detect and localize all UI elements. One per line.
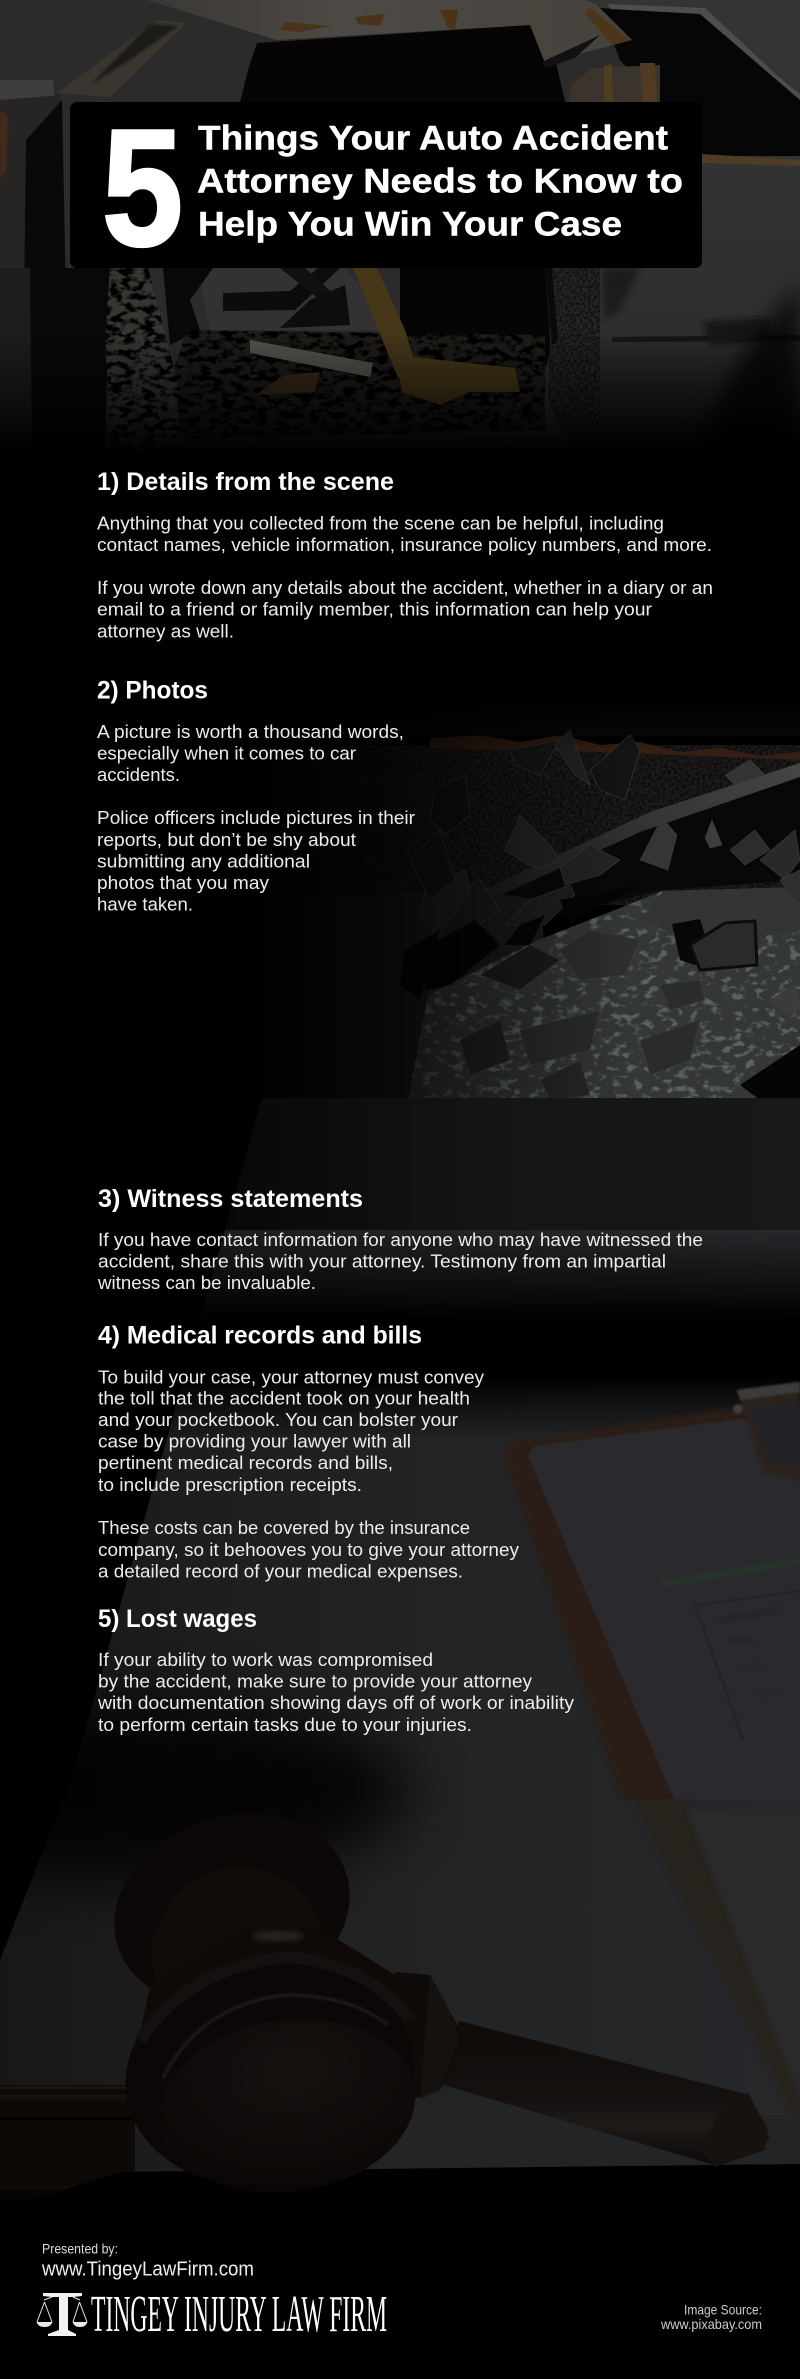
footer: image source: Image Source: [684,2301,762,2317]
title banner [70,96,702,281]
yellow frame [353,268,418,378]
section 5 heading: 5) Lost wages [98,1605,257,1633]
glass shards [410,730,800,1100]
rusted pillar [568,65,660,156]
clipboard frame [503,1400,800,1830]
gavel handle [440,2021,770,2165]
section 4 body: to include prescription receipts. [98,1475,362,1495]
footer: presented by: www.TingeyLawFirm.com [41,2259,254,2281]
rear frame [590,0,800,96]
section 5 body: If your ability to work was compromised [98,1650,433,1670]
icon: scales of justice T [36,2293,88,2336]
section 3 body: If you have contact information for anyone who may have witnessed the [98,1230,703,1250]
background photo: shattered glass car [238,680,800,1100]
background photo: gavel [0,1700,800,2379]
section 4 body: To build your case, your attorney must convey [98,1367,484,1387]
section 4 body: These costs can be covered by the insurance [98,1518,470,1538]
title text: Things Your Auto Accident [198,120,668,158]
paper details [660,1558,800,1588]
section 2 heading: 2) Photos [97,677,208,705]
section 1 body: contact names, vehicle information, insurance policy numbers, and more. [97,535,712,555]
section 2 body: Police officers include pictures in their [97,808,415,828]
section 3 heading: 3) Witness statements [98,1185,363,1213]
left pillar [57,20,187,97]
section 2: photos [97,677,415,915]
section 5: lost wages [97,1605,574,1735]
section 2 body: reports, but don’t be shy about [97,830,356,850]
section 3 body: accident, share this with your attorney. Testimony from an impartial [98,1252,666,1272]
tire [30,268,110,450]
gavel front head [111,1944,429,2206]
footer: presented by [41,2240,254,2281]
clipboard clip [737,1382,800,1480]
section 5 body: to perform certain tasks due to your injuries. [98,1715,472,1735]
section 4 body: pertinent medical records and bills, [98,1453,393,1473]
footer: image source: www.pixabay.com [660,2316,762,2332]
roof beam [147,0,632,63]
white bar [250,340,373,377]
section 4 body: and your pocketbook. You can bolster your [98,1410,458,1430]
section 4 body [98,1367,519,1581]
section 2 body: especially when it comes to car [97,743,356,763]
window view [197,268,395,330]
mirror [672,919,757,970]
section 3 body: witness can be invaluable. [97,1273,316,1293]
section 2 body [97,722,415,915]
section 5 body: with documentation showing days off of work or inability [97,1693,574,1713]
title text [197,120,683,244]
section 3 body [97,1230,703,1293]
gavel collars [395,1972,465,2100]
section 2 body: accidents. [97,765,180,785]
debris [150,330,545,440]
section 2 body: photos that you may [97,873,269,893]
background photo: clipboard [63,1098,800,1830]
section 4 heading: 4) Medical records and bills [98,1322,422,1350]
section 4 body: case by providing your lawyer with all [98,1432,411,1452]
big number 5: 5 [102,96,183,281]
title text: Attorney Needs to Know to [197,162,683,200]
section 1 body: attorney as well. [97,622,234,642]
section 2 body: have taken. [97,895,193,915]
section 4 body: the toll that the accident took on your health [98,1389,470,1409]
car interior [230,25,566,380]
section 5 body: by the accident, make sure to provide your attorney [98,1672,532,1692]
door edge [545,268,600,450]
section 1 body: If you wrote down any details about the accident, whether in a diary or an [97,578,713,598]
section 3: witness statements [97,1185,703,1293]
section 4 body: a detailed record of your medical expenses. [98,1561,463,1581]
section 1: details from the scene [97,468,713,642]
section 1 body: Anything that you collected from the scene can be helpful, including [97,514,664,534]
infographic canvas: TINGEY INJURY LAW FIRM [91,2286,387,2343]
section 1 body: email to a friend or family member, this information can help your [97,600,652,620]
section 2 body: submitting any additional [97,851,310,871]
footer: image source [660,2301,762,2332]
rear window [600,8,800,156]
background photo: wrecked car [0,0,800,455]
section 1 body [97,514,713,642]
clipboard paper [528,1413,800,1830]
gavel rear head [89,1784,375,2036]
footer: presented by: Presented by: [42,2240,118,2256]
sounding block [0,2085,135,2200]
section 5 body [97,1650,574,1735]
section 4: medical records and bills [98,1322,519,1581]
section 1 heading: 1) Details from the scene [97,468,394,496]
title text: Help You Win Your Case [198,206,622,244]
section 4 body: company, so it behooves you to give your attorney [98,1540,519,1560]
section 2 body: A picture is worth a thousand words, [97,722,404,742]
gavel barrel [135,1925,420,2090]
door panel [598,156,800,450]
footer: law firm logo [36,2286,387,2343]
